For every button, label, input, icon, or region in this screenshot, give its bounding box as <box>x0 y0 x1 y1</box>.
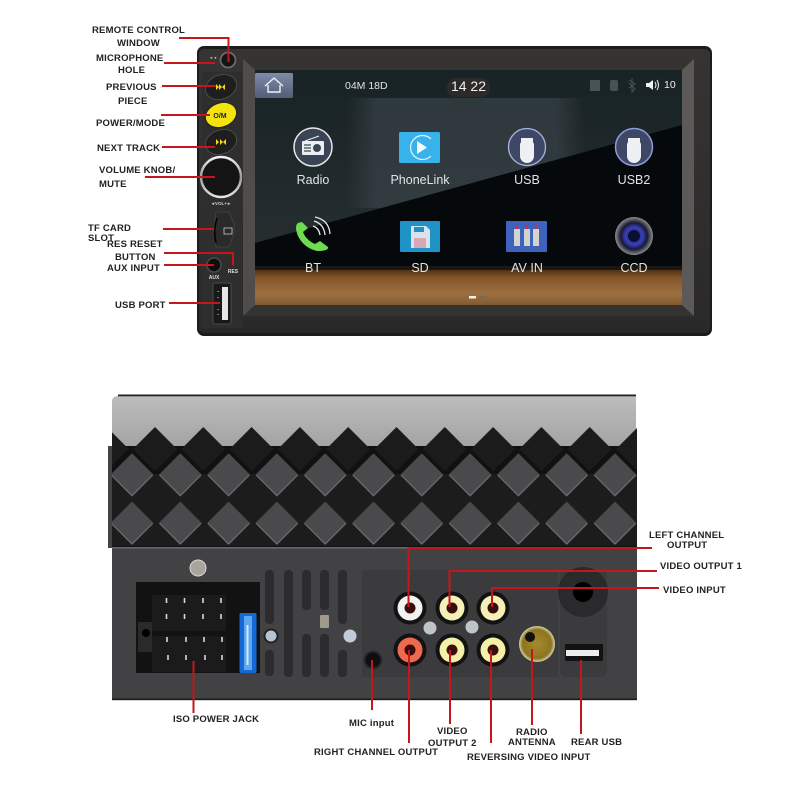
vent slots <box>265 570 347 677</box>
ISO connector <box>136 582 260 673</box>
rear vent: dark background <box>112 446 637 548</box>
status date: 04M 18D <box>345 80 388 92</box>
app: USB2 <box>616 128 652 187</box>
front panel head unit <box>197 46 712 336</box>
AUX jack and reset <box>207 258 239 281</box>
rear panel labels: RIGHT CHANNEL OUTPUT <box>314 747 438 758</box>
remote window and microphone: ◄◄ <box>209 55 217 60</box>
front panel labels: TF CARD <box>88 223 131 234</box>
page dots <box>469 296 486 298</box>
rear panel labels: OUTPUT 2 <box>428 738 477 749</box>
rear panel labels: ISO POWER JACK <box>173 714 259 725</box>
wood shelf <box>255 269 682 305</box>
app: PhoneLink <box>390 132 450 187</box>
callouts: red leader lines <box>145 38 659 743</box>
front panel labels: SLOT <box>88 233 114 244</box>
rear top: silver cover <box>112 396 636 448</box>
screw <box>190 560 206 576</box>
GPS recess <box>560 570 607 677</box>
app: AV IN <box>506 221 547 275</box>
rear panel labels <box>173 530 742 763</box>
rear panel labels: REAR USB <box>571 737 622 748</box>
front panel labels: VOLUME KNOB/ <box>99 165 175 176</box>
blue fuse <box>240 613 256 673</box>
AUX jack and reset: RES <box>228 269 239 275</box>
status icons: 10 <box>664 79 676 91</box>
rear panel labels: ANTENNA <box>508 737 556 748</box>
RCA screws <box>424 620 478 634</box>
rear panel labels: LEFT CHANNEL <box>649 530 724 541</box>
front panel labels: PIECE <box>118 96 148 107</box>
front panel labels: NEXT TRACK <box>97 143 160 154</box>
front panel labels: MICROPHONE <box>96 53 163 64</box>
app: Radio: Radio <box>297 173 329 187</box>
rear panel labels: RADIO <box>516 727 548 738</box>
remote window and microphone <box>209 52 236 68</box>
AUX jack and reset: AUX <box>209 275 220 281</box>
status icons <box>590 78 676 92</box>
screen bezel <box>243 59 694 316</box>
TF card slot <box>214 212 234 247</box>
rear USB <box>565 644 603 661</box>
app: CCD: CCD <box>620 261 648 275</box>
front panel labels: POWER/MODE <box>96 118 165 129</box>
app: USB <box>508 128 546 187</box>
radio antenna <box>519 626 555 662</box>
rear panel labels: VIDEO OUTPUT 1 <box>660 561 742 572</box>
front panel labels <box>88 25 185 311</box>
front panel labels: PREVIOUS <box>106 82 157 93</box>
front panel labels: AUX INPUT <box>107 263 160 274</box>
rear panel labels: REVERSING VIDEO INPUT <box>467 752 590 763</box>
button: previous <box>202 70 240 104</box>
app: CCD <box>615 217 653 275</box>
clock <box>447 78 490 97</box>
app: Radio <box>294 128 332 187</box>
screen display <box>255 70 682 305</box>
rear panel labels: VIDEO INPUT <box>663 585 726 596</box>
front panel labels: BUTTON <box>115 252 156 263</box>
rear panel labels: VIDEO <box>437 726 468 737</box>
front panel labels: HOLE <box>118 65 145 76</box>
rear panel labels: MIC input <box>349 718 395 729</box>
app: SD <box>400 221 440 275</box>
RCA jack row: top <box>394 592 510 624</box>
front panel labels: MUTE <box>99 179 127 190</box>
volume knob <box>201 157 241 206</box>
app: AV IN: AV IN <box>511 261 543 275</box>
button: power mode: O/M <box>213 113 227 120</box>
volume knob: ◄VOL+► <box>211 201 231 206</box>
front panel labels: USB PORT <box>115 300 166 311</box>
panel: outer housing <box>197 46 712 336</box>
button: next <box>202 125 240 159</box>
rear panel labels: OUTPUT <box>667 540 707 551</box>
front panel labels: WINDOW <box>117 38 160 49</box>
panel: control strip <box>202 72 242 328</box>
side screw <box>264 630 278 642</box>
home button <box>255 73 293 98</box>
GPS hole <box>558 567 608 617</box>
RCA jack row: bottom <box>394 634 510 666</box>
front USB port <box>213 283 231 324</box>
button: power mode <box>202 98 240 132</box>
rear chassis <box>108 394 637 700</box>
app: BT <box>296 217 330 275</box>
clock: 14 22 <box>451 78 486 94</box>
app: BT: BT <box>305 261 321 275</box>
app: USB: USB <box>514 173 540 187</box>
RCA recess <box>362 570 558 677</box>
app: SD: SD <box>411 261 429 275</box>
mic jack <box>364 652 382 668</box>
front panel labels: REMOTE CONTROL <box>92 25 185 36</box>
front panel labels: RES RESET <box>107 239 163 250</box>
plate clip and screw <box>320 615 356 642</box>
rear plate <box>112 547 637 700</box>
app: PhoneLink: PhoneLink <box>390 173 450 187</box>
app: USB2: USB2 <box>618 173 650 187</box>
